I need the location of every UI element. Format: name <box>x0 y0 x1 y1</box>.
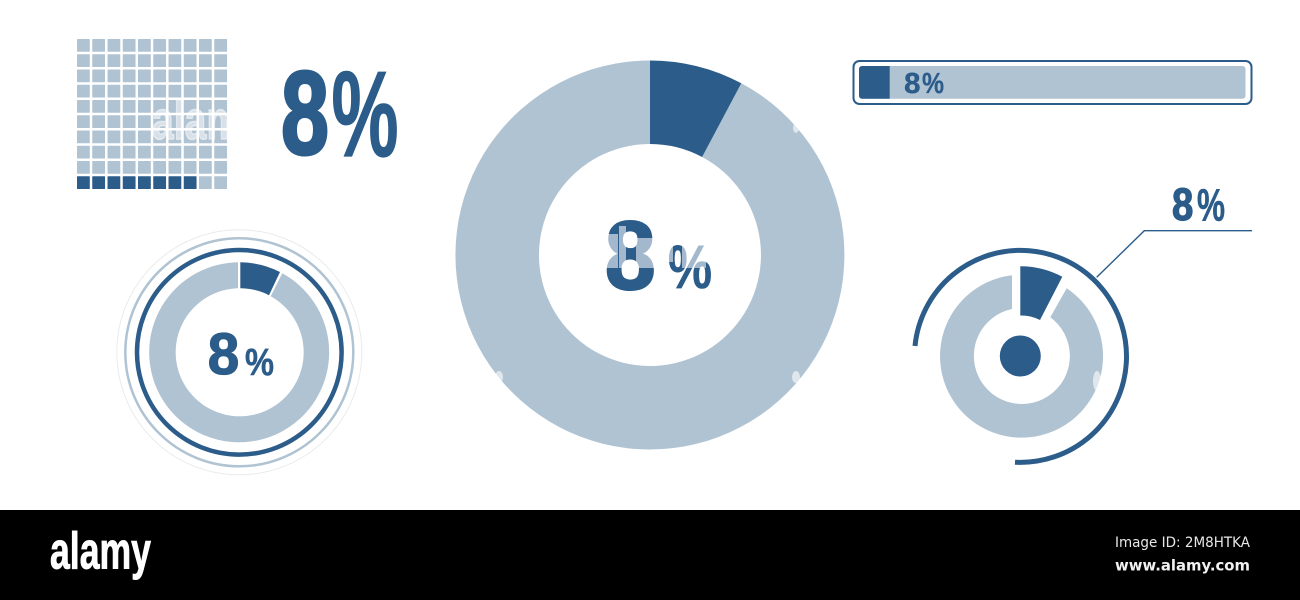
panel: progress bar <box>854 61 1252 104</box>
waffle value <box>281 46 398 182</box>
bar value: % <box>922 68 944 100</box>
footer band <box>0 510 1300 600</box>
donut remainder <box>455 60 844 450</box>
donut value: 8 <box>605 201 656 310</box>
waffle value: % <box>332 46 398 182</box>
ring value <box>208 322 274 387</box>
waffle value: 8 <box>281 47 329 180</box>
watermark specks on donut <box>495 123 800 383</box>
callout value: 8 <box>1172 179 1193 230</box>
exploded 8% segment <box>1020 266 1062 320</box>
panel: exploded donut with callout <box>915 179 1252 462</box>
footer logo: alamy <box>50 522 151 580</box>
panel: large donut chart <box>455 60 844 450</box>
panel: waffle chart <box>77 39 398 189</box>
outer arc <box>915 250 1126 462</box>
bar track <box>859 66 1246 99</box>
image id: Image ID: 2M8HTKA <box>1115 535 1250 551</box>
donut value: % <box>668 233 712 301</box>
donut 8% segment <box>650 60 741 157</box>
ring 8% segment <box>240 262 280 295</box>
donut remainder <box>940 275 1103 438</box>
bar 8% fill <box>859 66 890 99</box>
bar frame <box>854 61 1252 104</box>
ring value: % <box>245 342 274 384</box>
ring value: 8 <box>208 322 239 387</box>
site url: www.alamy.com <box>1115 556 1250 574</box>
bar value <box>904 68 944 100</box>
outer decorative rings <box>117 230 362 475</box>
watermark over waffle: alamy <box>152 89 263 151</box>
callout leader line <box>1097 231 1252 277</box>
waffle grid filled cells <box>77 176 197 189</box>
bar value: 8 <box>904 68 920 100</box>
callout value <box>1172 179 1225 230</box>
waffle grid light cells <box>77 39 227 189</box>
ring remainder <box>149 262 329 442</box>
donut value <box>605 201 712 310</box>
watermark speck <box>1093 371 1101 391</box>
panel: ringed donut chart <box>117 230 362 475</box>
callout value: % <box>1197 180 1225 230</box>
centre dot <box>1000 336 1041 376</box>
